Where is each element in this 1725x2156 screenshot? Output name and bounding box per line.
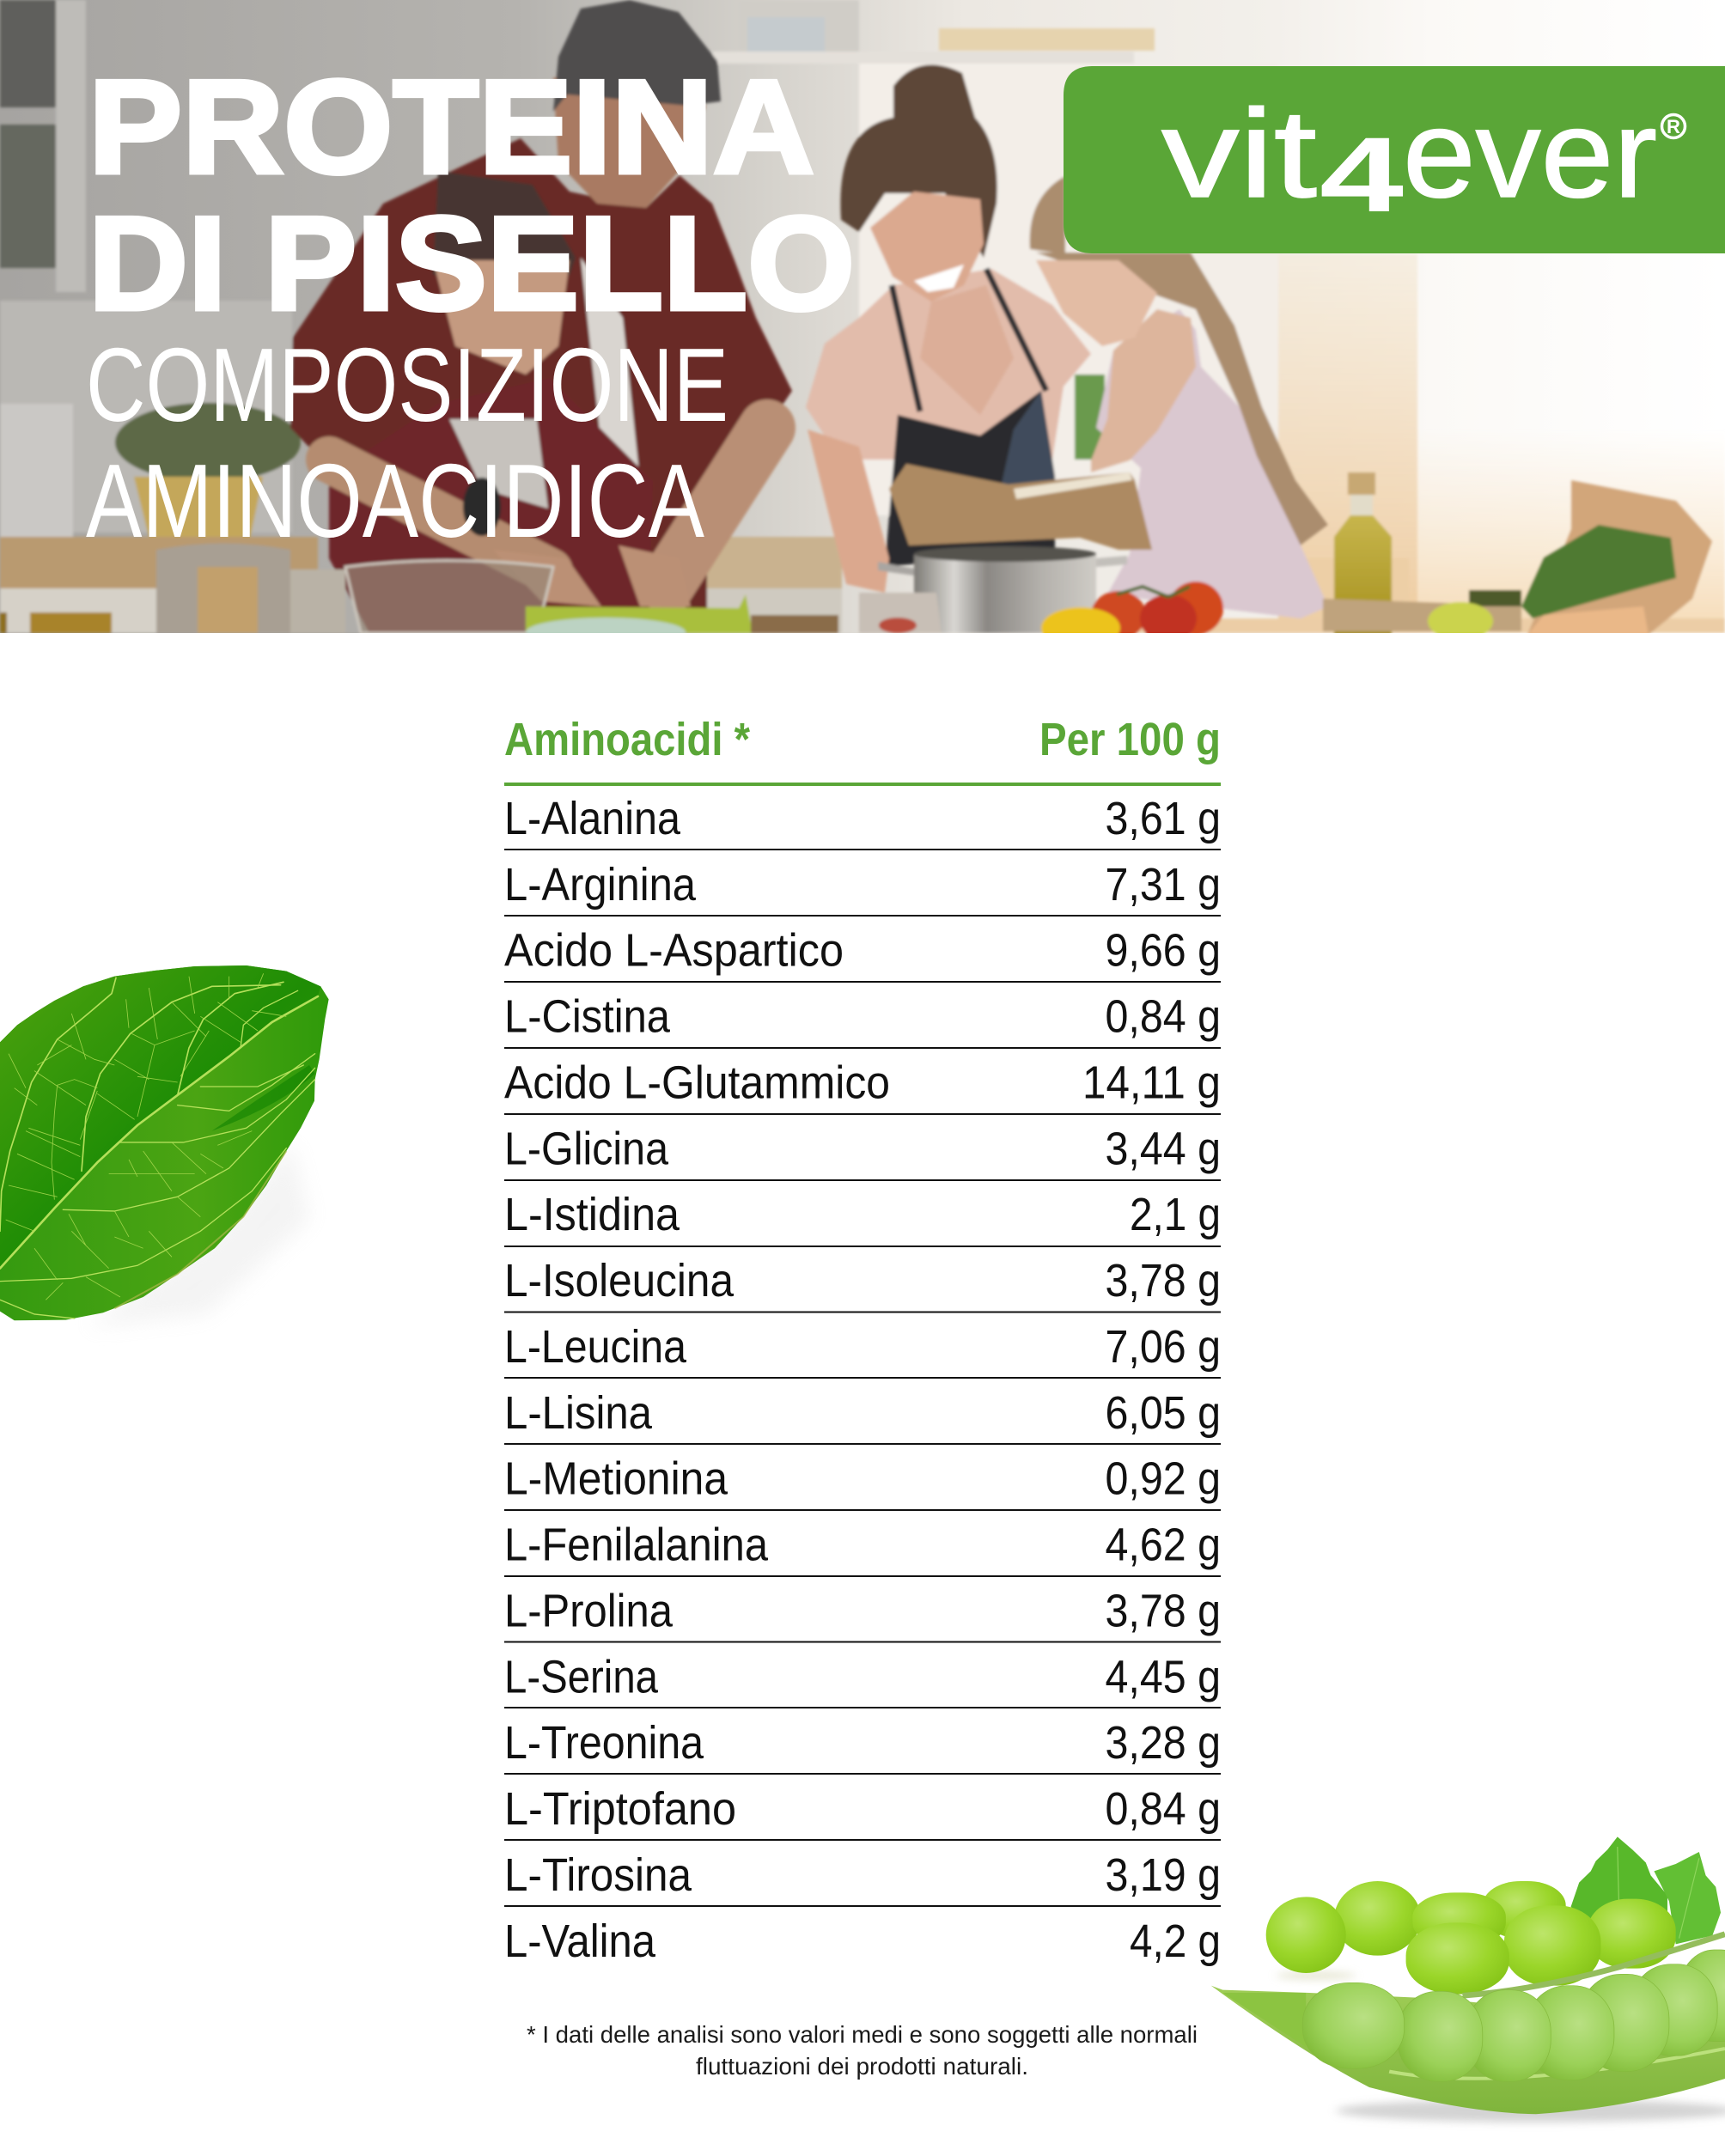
row: L-Serina: 4,45 g	[1105, 1651, 1221, 1702]
hero photo: family cooking in kitchen	[0, 0, 1725, 649]
row: L-Arginina	[504, 859, 1221, 917]
leaves	[1571, 1836, 1721, 1944]
row: L-Alanina: L-Alanina	[504, 793, 681, 844]
woman	[806, 269, 1091, 460]
row: L-Arginina: 7,31 g	[1105, 859, 1221, 911]
book	[889, 464, 1152, 550]
row: L-Tirosina: L-Tirosina	[504, 1849, 692, 1901]
pod peas	[1302, 1950, 1725, 2081]
footnote: fluttuazioni dei prodotti naturali.	[696, 2053, 1028, 2080]
row: L-Treonina	[504, 1717, 1221, 1775]
row: L-Triptofano: 0,84 g	[1105, 1783, 1221, 1835]
logo: vit4ever badge: vit	[1161, 83, 1317, 223]
plant and pasta	[115, 403, 301, 482]
row: Acido L-Glutammico: 14,11 g	[1082, 1057, 1221, 1108]
logo: vit4ever badge: 4	[1320, 116, 1404, 234]
table: amino acids per 100 g	[504, 793, 1221, 1967]
row: L-Glicina: L-Glicina	[504, 1123, 669, 1174]
subtitle: COMPOSIZIONE AMINOACIDICA	[86, 326, 728, 559]
logo: vit4ever badge	[1064, 66, 1725, 253]
jar with tomato	[859, 593, 942, 633]
kraft bag and greens	[1527, 480, 1712, 635]
row: L-Isoleucina	[504, 1255, 1221, 1312]
row: L-Metionina: L-Metionina	[504, 1453, 728, 1505]
row: L-Glicina: 3,44 g	[1105, 1123, 1221, 1174]
row: L-Arginina: L-Arginina	[504, 859, 697, 911]
row: L-Prolina	[504, 1585, 1221, 1642]
row: L-Lisina: 6,05 g	[1105, 1387, 1221, 1439]
row: Acido L-Glutammico	[504, 1057, 1221, 1115]
oil bottle	[1348, 472, 1375, 495]
row: L-Cistina: L-Cistina	[504, 991, 671, 1043]
row: L-Lisina: L-Lisina	[504, 1387, 653, 1439]
row: L-Triptofano	[504, 1783, 1221, 1841]
row: L-Leucina	[504, 1321, 1221, 1379]
row: L-Valina: 4,2 g	[1130, 1915, 1221, 1967]
row: L-Lisina	[504, 1387, 1221, 1445]
row: L-Fenilalanina: L-Fenilalanina	[504, 1520, 769, 1571]
icon: green leaf	[0, 965, 329, 1327]
title: PROTEINA DI PISELLO: DI PISELLO	[88, 189, 855, 338]
row: Acido L-Aspartico: 9,66 g	[1105, 925, 1221, 977]
leaf veins	[0, 978, 318, 1319]
row: Acido L-Glutammico: Acido L-Glutammico	[504, 1057, 890, 1108]
row: L-Isoleucina: L-Isoleucina	[504, 1255, 734, 1306]
row: L-Serina	[504, 1651, 1221, 1708]
row: L-Isoleucina: 3,78 g	[1105, 1255, 1221, 1306]
counter	[0, 537, 318, 588]
row: L-Treonina: 3,28 g	[1105, 1717, 1221, 1769]
table header: Aminoacidi *	[504, 714, 750, 765]
table header: Per 100 g	[1039, 714, 1221, 765]
row: L-Leucina: 7,06 g	[1105, 1321, 1221, 1373]
logo: vit4ever badge: ever	[1403, 83, 1657, 223]
man	[290, 138, 792, 633]
row: L-Alanina: 3,61 g	[1105, 793, 1221, 844]
row: Acido L-Aspartico: Acido L-Aspartico	[504, 925, 844, 977]
row: L-Prolina: L-Prolina	[504, 1585, 674, 1636]
row: L-Glicina	[504, 1123, 1221, 1181]
row: L-Treonina: L-Treonina	[504, 1717, 704, 1769]
row: L-Cistina	[504, 991, 1221, 1049]
boy	[433, 171, 576, 275]
row: L-Alanina	[504, 793, 1221, 850]
bread and apple	[1323, 599, 1521, 631]
row: Acido L-Aspartico	[504, 925, 1221, 983]
title: PROTEINA DI PISELLO	[88, 52, 855, 338]
subtitle: COMPOSIZIONE AMINOACIDICA: COMPOSIZIONE	[86, 326, 728, 443]
tomatoes and pepper	[1091, 591, 1146, 639]
logo: vit4ever badge: R	[1667, 116, 1680, 137]
row: L-Istidina: 2,1 g	[1130, 1189, 1221, 1240]
jars, bowl and celery	[0, 612, 7, 633]
icon: peas in pod	[1211, 1836, 1725, 2123]
girl	[1030, 176, 1328, 557]
pod stem	[1462, 1934, 1725, 1995]
row: L-Valina	[504, 1915, 1221, 1967]
row: L-Prolina: 3,78 g	[1105, 1585, 1221, 1636]
row: L-Triptofano: L-Triptofano	[504, 1783, 736, 1835]
table header	[504, 714, 1221, 786]
title: PROTEINA DI PISELLO: PROTEINA	[88, 52, 814, 201]
subtitle: COMPOSIZIONE AMINOACIDICA: AMINOACIDICA	[86, 442, 705, 559]
row: L-Fenilalanina	[504, 1520, 1221, 1577]
row: L-Serina: L-Serina	[504, 1651, 659, 1702]
footnote: * I dati delle analisi sono valori medi e sono soggetti alle normali	[527, 2021, 1198, 2048]
row: L-Tirosina: 3,19 g	[1105, 1849, 1221, 1901]
row: L-Istidina	[504, 1189, 1221, 1247]
row: L-Fenilalanina: 4,62 g	[1105, 1520, 1221, 1571]
row: L-Metionina: 0,92 g	[1105, 1453, 1221, 1505]
pot	[914, 554, 1096, 633]
row: L-Tirosina	[504, 1849, 1221, 1907]
row: L-Leucina: L-Leucina	[504, 1321, 687, 1373]
row: L-Cistina: 0,84 g	[1105, 991, 1221, 1043]
footnote	[527, 2021, 1198, 2080]
pod shell	[1211, 1986, 1725, 2114]
row: L-Metionina	[504, 1453, 1221, 1511]
row: L-Istidina: L-Istidina	[504, 1189, 680, 1240]
back of kitchen	[0, 0, 56, 107]
row: L-Valina: L-Valina	[504, 1915, 656, 1967]
loose peas	[1266, 1881, 1676, 1995]
